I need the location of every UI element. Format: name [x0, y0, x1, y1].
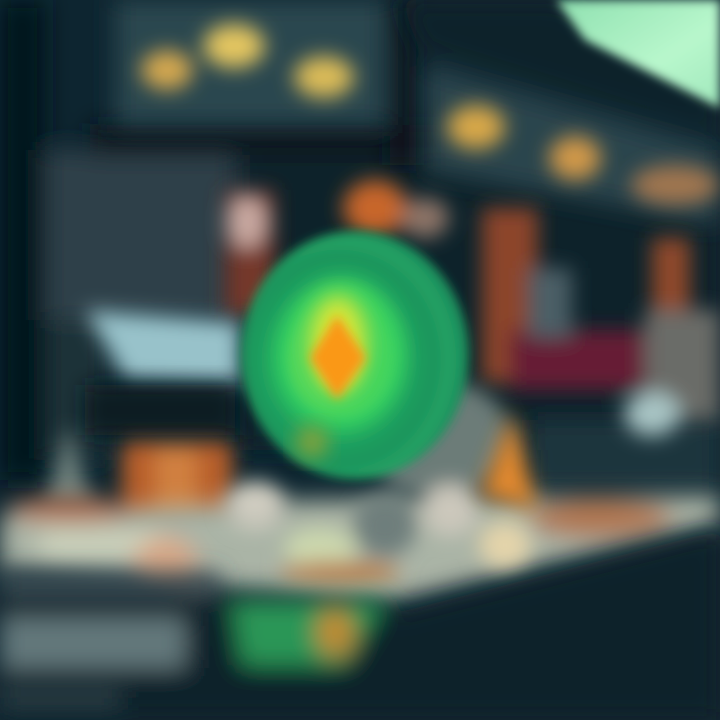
panel: upper left window	[115, 0, 416, 165]
table surface	[0, 495, 720, 612]
panel: upper right window	[400, 0, 720, 225]
wall panels	[0, 0, 720, 490]
awning light blue panel	[85, 310, 240, 385]
background figures in orange and maroon	[225, 180, 720, 436]
lower dark bands	[0, 530, 720, 720]
ceiling lights	[141, 24, 719, 205]
icon: green orb	[241, 231, 469, 479]
orange cone	[480, 412, 538, 510]
glass stand and food items	[225, 380, 531, 583]
small pale bottle	[45, 425, 92, 505]
orange cup	[122, 442, 232, 527]
dark gap below awning	[85, 385, 235, 435]
bright green screen	[556, 0, 720, 108]
